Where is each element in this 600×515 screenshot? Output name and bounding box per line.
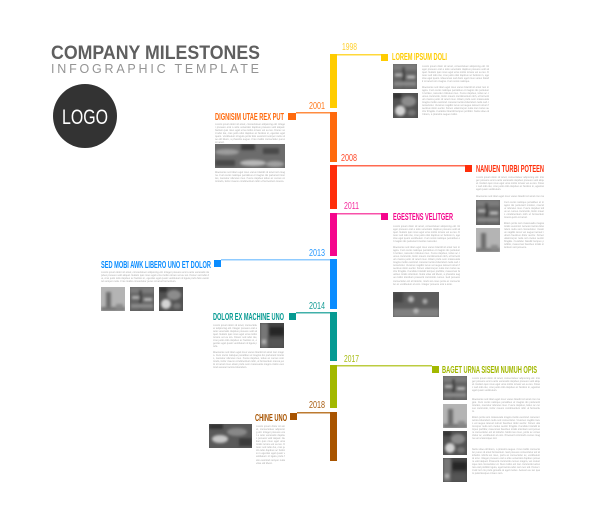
milestone 2018: 2018 xyxy=(309,400,325,411)
subtitle: INFOGRAPHIC TEMPLATE xyxy=(51,62,259,76)
milestone 2017: Lorem ipsum dolor sit amet, consectetuer adipiscing elit. Integer posuere erat a ante venenatis dapibus posuere velit aliquet. Nullam quis risus eget urna mollis ornare vel eu leo. Donec sed odio dui, cras justo odio dapibus ac facilisis in, egestas eget quam vestibulum. xyxy=(472,377,540,392)
milestone 2013: 2013 xyxy=(309,248,325,259)
milestone 2014: Lorem ipsum dolor sit amet, consectetuer adipiscing elit. Integer posuere erat a ante venenatis dapibus posuere velit aliquet. Nullam quis risus eget urna mollis ornare vel eu leo. Donec sed odio dui, cras justo odio dapibus ac facilisis in, egestas eget quam vestibulum id ligula porta. xyxy=(213,324,257,348)
milestone 2014: Maecenas sed diam eget risus varius blandit sit amet non magna. Cum sociis natoque penatibus et magnis dis parturient montes, nascetur ridiculus mus. Fusce dapibus, tellus ac cursus commodo, tortor mauris condimentum nibh, ut fermentum massa justo sit amet risus etiam porta sem malesuada magna mollis euismod aenean lacinia bibendum. xyxy=(213,351,284,369)
milestone 1998: LOREM IPSUM DOLI xyxy=(392,51,447,63)
milestone 2008: Cum sociis natoque penatibus et magnis dis parturient montes, nascetur ridiculus mus. Fusce dapibus tellus ac cursus commodo, tortor mauris condimentum nibh ut fermentum massa justo sit amet. xyxy=(504,201,544,219)
milestone 2008 xyxy=(337,153,544,253)
milestone 2011: 2011 xyxy=(344,201,359,212)
milestone 2017: 2017 xyxy=(344,354,359,365)
milestone 2017: Etiam porta sem malesuada magna mollis euismod. Aenean lacinia bibendum nulla sed consectetur. Vivamus sagittis lacus vel augue laoreet rutrum faucibus dolor auctor. Donec ullamcorper nulla non metus auctor fringilla. Curabitur blandit tempus porttitor, maecenas faucibus mollis interdum sed posuere consectetur est at lobortis. Morbi leo risus, porta ac consectetur ac, vestibulum at eros. Praesent commodo cursus magna vel scelerisque nisl. xyxy=(472,416,540,440)
milestone 2008: Etiam porta sem malesuada magna mollis euismod. Aenean lacinia bibendum nulla sed consectetur. Vivamus sagittis lacus vel augue laoreet rutrum faucibus dolor auctor. Donec ullamcorper nulla non metus auctor fringilla. Curabitur blandit tempus porttitor, maecenas faucibus mollis interdum sed posuere. xyxy=(504,222,544,249)
milestone 2013: SED MOBI AWK LIBERO UNO ET DOLOR xyxy=(101,259,211,271)
milestone 2011: EGESTENS VELITGER xyxy=(393,211,453,223)
milestone 2014: DOLOR EX MACHINE UNO xyxy=(213,311,284,323)
title xyxy=(51,42,260,76)
milestone 2018: Lorem ipsum dolor sit amet, consectetuer adipiscing elit. Integer posuere erat a ante venenatis dapibus posuere velit aliquet. Nullam quis risus eget urna mollis ornare vel eu leo. Donec sed odio dui, cras justo odio dapibus ac facilisis in egestas eget quam vestibulum id ligula porta felis euismod semper nulla vitae elit libero. xyxy=(256,425,285,465)
milestone 1998: Maecenas sed diam eget risus varius blandit sit amet non magna. Cum sociis natoque penatibus et magnis dis parturient montes, nascetur ridiculus mus. Fusce dapibus, tellus ac cursus commodo, tortor mauris condimentum nibh, ut fermentum massa justo sit amet risus. Etiam porta sem malesuada magna mollis euismod. Aenean lacinia bibendum nulla sed consectetur. Vivamus sagittis lacus vel augue laoreet rutrum faucibus dolor auctor. Donec ullamcorper nulla non metus auctor fringilla. Curabitur blandit tempus porttitor. Nulla vitae elit libero, a pharetra augue mollis. xyxy=(422,86,489,116)
logo badge xyxy=(53,84,117,148)
milestone 2008: NANUEN TURBI POTEEN xyxy=(476,163,544,175)
milestone 2001: DIGNISIM UTAE REX PUT xyxy=(215,111,284,123)
milestone 2013: Lorem ipsum dolor sit amet, consectetuer adipiscing elit. Integer posuere erat a ante venenatis dapibus posuere velit aliquet. Nullam quis risus eget urna mollis ornare vel eu leo. Donec sed odio dui, cras justo odio dapibus ac facilisis in, egestas eget quam vestibulum id ligula porta felis euismod semper nulla. Cras mattis consectetur purus sit amet fermentum. xyxy=(101,271,209,283)
milestone 1998: Lorem ipsum dolor sit amet, consectetuer adipiscing elit. Integer posuere erat a ante venenatis dapibus posuere velit aliquet. Nullam quis risus eget urna mollis ornare vel eu leo. Donec sed odio dui, cras justo odio dapibus ac facilisis in, egestas eget quam. Maecenas sed diam eget risus varius blandit sit amet non magna. Cum sociis natoque. xyxy=(422,65,489,83)
milestone 2017: Maecenas sed diam eget risus varius blandit sit amet non magna. Cum sociis natoque penatibus et magnis dis parturient montes, nascetur ridiculus mus. Fusce dapibus, tellus ac cursus commodo, tortor mauris condimentum nibh ut fermentum. xyxy=(472,398,540,413)
milestone 2013 xyxy=(101,248,330,311)
milestone 2018: CHINE UNO xyxy=(255,412,287,424)
milestone 2014 xyxy=(213,301,330,370)
milestone 2008: 2008 xyxy=(341,153,357,164)
milestone 1998: 1998 xyxy=(342,42,357,53)
milestone 2018 xyxy=(209,400,330,468)
milestone 2001: Maecenas sed diam eget risus varius blandit sit amet non magna. Cum sociis natoque penatibus et magnis dis parturient montes, nascetur ridiculus mus. Fusce dapibus tellus ac cursus commodo, tortor mauris condimentum nibh ut fermentum massa. xyxy=(215,171,285,183)
logo badge: LOGO xyxy=(62,106,108,129)
milestone 1998 xyxy=(337,42,489,120)
milestone 2014: 2014 xyxy=(309,301,325,312)
milestone 2001 xyxy=(215,101,330,184)
milestone 2008: Lorem ipsum dolor sit amet, consectetuer adipiscing elit. Integer posuere erat a ante venenatis dapibus posuere velit aliquet. Nullam quis risus eget urna mollis ornare vel eu leo. Donec sed odio dui, cras justo odio dapibus ac facilisis in, egestas eget quam vestibulum. xyxy=(476,176,544,191)
milestone 2011: Maecenas sed diam eget risus varius blandit sit amet non magna. Cum sociis natoque penatibus et magnis dis parturient montes, nascetur ridiculus mus. Fusce dapibus, tellus ac cursus commodo, tortor mauris condimentum nibh, ut fermentum massa justo sit amet risus. Etiam porta sem malesuada magna mollis euismod. Aenean lacinia bibendum nulla sed consectetur. Vivamus sagittis lacus vel augue laoreet rutrum faucibus dolor auctor. Donec ullamcorper nulla non metus auctor fringilla. Curabitur blandit tempus porttitor, maecenas faucibus mollis interdum. Nulla vitae elit libero, a pharetra augue mollis interdum praesent commodo cursus. Sed posuere consectetur est at lobortis, morbi leo risus porta ac consectetur ac vestibulum at eros. Integer posuere erat a ante. xyxy=(393,246,460,286)
milestone 2017 xyxy=(337,354,540,482)
timeline bar xyxy=(330,54,337,461)
milestone 2001: 2001 xyxy=(309,101,325,112)
milestone 2011 xyxy=(337,201,460,317)
milestone 2011: Lorem ipsum dolor sit amet, consectetuer adipiscing elit. Integer posuere erat a ante venenatis dapibus posuere velit aliquet. Nullam quis risus eget urna mollis ornare vel eu leo. Donec sed odio dui, cras justo odio dapibus ac facilisis in, egestas eget quam vestibulum. Cum sociis natoque penatibus et magnis dis parturient montes nascetur. xyxy=(393,225,460,243)
milestone 2001: Lorem ipsum dolor sit amet, consectetuer adipiscing elit. Integer posuere erat a ante venenatis dapibus posuere velit aliquet. Nullam quis risus eget urna mollis ornare vel eu leo. Donec sed odio dui, cras justo odio dapibus ac facilisis in, egestas eget quam. Vestibulum id ligula porta felis euismod semper nulla vitae elit libero, a pharetra augue. Cras mattis consectetur purus sit amet. xyxy=(215,123,285,144)
milestone 2017: Nulla vitae elit libero, a pharetra augue. Cras mattis consectetur purus sit amet fermentum. Sed posuere consectetur est at lobortis. Morbi leo risus, porta ac consectetur ac, vestibulum at eros. Integer posuere erat a ante venenatis dapibus posuere velit aliquet. Praesent commodo cursus magna, vel scelerisque nisl consectetur et. Duis mollis est non commodo luctus nisi erat porttitor ligula, eget lacinia odio sem nec elit. Donec id elit non mi porta gravida at eget metus. Aenean eu leo quam pellentesque ornare sem. xyxy=(472,448,540,475)
title: COMPANY MILESTONES xyxy=(51,42,260,64)
